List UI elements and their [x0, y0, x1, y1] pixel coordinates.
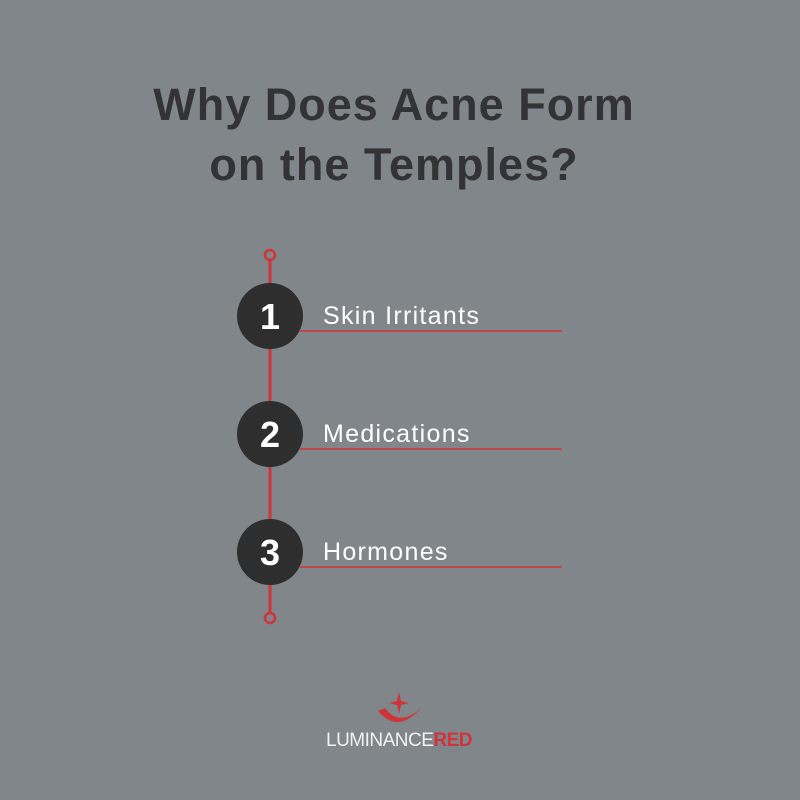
step 3	[237, 519, 303, 585]
title	[153, 79, 635, 190]
logo icon	[378, 692, 422, 722]
label 1: Skin Irritants	[323, 302, 480, 330]
title: on the Temples?	[209, 139, 579, 190]
title: Why Does Acne Form	[153, 79, 635, 130]
step 1: 1	[260, 296, 280, 337]
step 2: 2	[260, 414, 280, 455]
step 1	[237, 283, 303, 349]
logo text: LUMINANCERED	[326, 730, 472, 751]
label 3: Hormones	[323, 538, 449, 566]
step 2	[237, 401, 303, 467]
label 2: Medications	[323, 420, 471, 448]
step 3: 3	[260, 532, 280, 573]
